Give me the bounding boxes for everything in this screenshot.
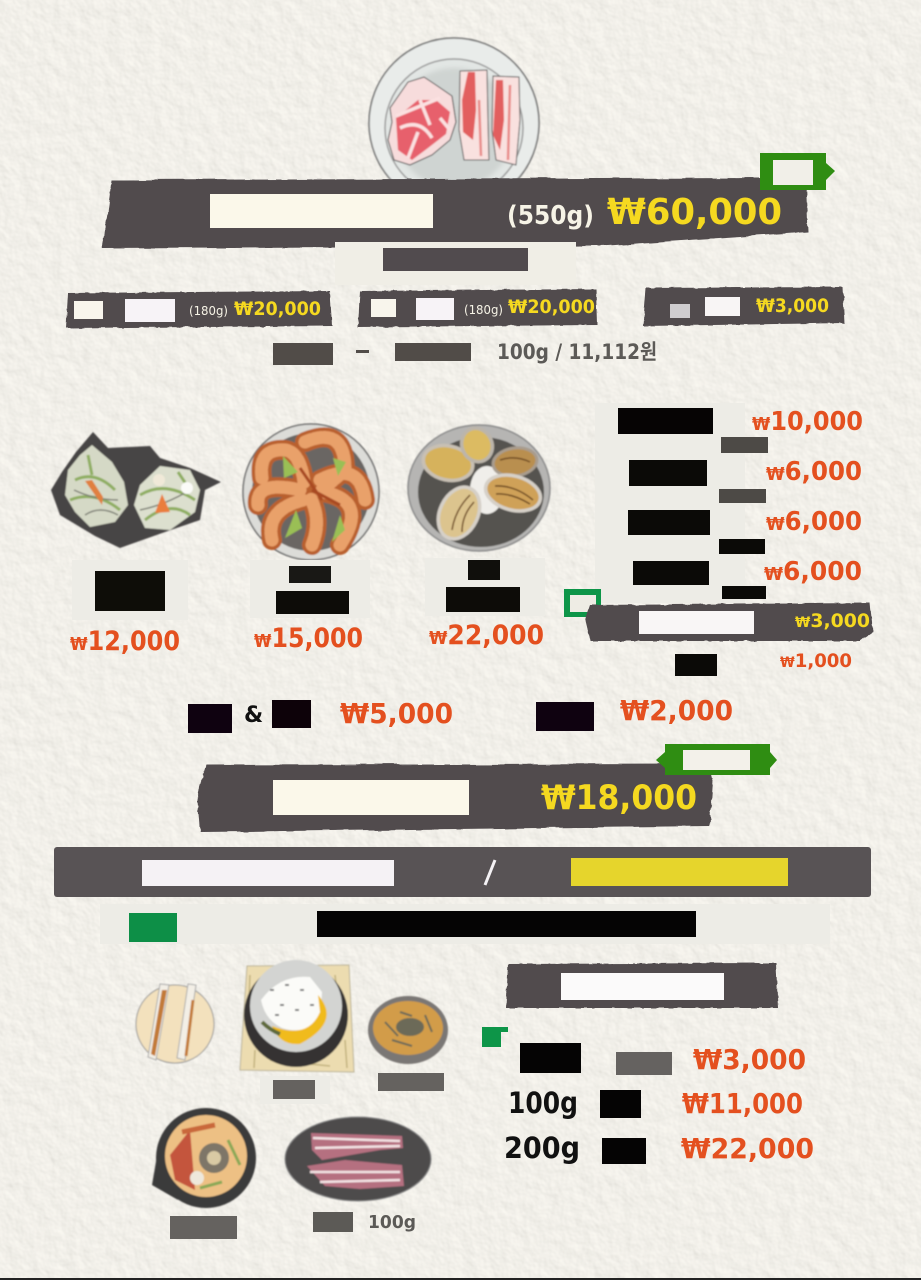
drink row: ₩2,000 xyxy=(620,694,733,727)
side item 4: ₩6,000 xyxy=(764,557,862,587)
price: dish 3: ₩22,000 xyxy=(429,620,544,651)
main set name xyxy=(210,194,433,228)
side bar: ₩3,000 xyxy=(795,610,870,632)
illustration: wooden lid xyxy=(136,984,214,1063)
side item 3: ₩6,000 xyxy=(766,507,862,537)
unit price line: 100g / 11,112원 xyxy=(497,340,657,364)
green marker small xyxy=(482,1027,508,1047)
drink row xyxy=(188,694,733,733)
green marker xyxy=(564,589,601,617)
food label: rice xyxy=(260,1076,330,1104)
panel heading: extra meat xyxy=(506,963,778,1008)
food label: pork with weight: 100g xyxy=(368,1212,416,1233)
side item 2: ₩6,000 xyxy=(766,457,862,487)
unit price line xyxy=(273,340,657,365)
dish 1 label xyxy=(72,560,188,620)
side item 1: ₩10,000 xyxy=(752,407,863,437)
side item 2 xyxy=(629,457,862,503)
illustration: stew pot xyxy=(152,1108,256,1208)
extra meat row 3: ₩22,000 xyxy=(681,1132,814,1165)
sub item bar 3: ₩3,000 xyxy=(756,295,829,317)
illustration: pork plate xyxy=(285,1117,431,1201)
food label: side xyxy=(378,1073,444,1091)
banner: lunch set xyxy=(197,764,713,832)
notice row xyxy=(100,904,830,944)
side item 4 xyxy=(633,557,862,599)
extra item: ₩1,000 xyxy=(780,650,852,672)
extra meat row 1 xyxy=(520,1043,806,1076)
main set weight: (550g) xyxy=(507,201,594,231)
sub item bar 1 xyxy=(66,291,332,328)
sub item bar 2: (180g) xyxy=(464,303,503,317)
extra meat row 2: ₩11,000 xyxy=(682,1087,803,1120)
illustration: meat plate xyxy=(369,38,539,208)
extra meat row 1: ₩3,000 xyxy=(693,1043,806,1076)
banner: main set xyxy=(102,178,808,248)
sub item bar 2: ₩20,000 xyxy=(508,296,595,318)
extra item xyxy=(675,650,852,676)
sub item bar 3 xyxy=(643,287,845,326)
food label: stew xyxy=(170,1216,237,1239)
sub item bar 1: (180g) xyxy=(189,304,228,318)
sub item bar 1: ₩20,000 xyxy=(234,298,321,320)
tag: green badge top xyxy=(760,153,835,190)
drink row: & xyxy=(244,703,263,728)
dish 3 label xyxy=(425,558,545,616)
illustration: abalone plate xyxy=(408,423,550,551)
extra meat row 3 xyxy=(504,1131,814,1165)
drink row: ₩5,000 xyxy=(340,697,453,730)
tag: green badge middle xyxy=(656,744,777,775)
price: dish 2: ₩15,000 xyxy=(254,623,363,654)
price: dish 1: ₩12,000 xyxy=(70,626,180,657)
sub item bar 2 xyxy=(358,289,597,327)
main set price: ₩60,000 xyxy=(607,192,782,233)
illustration: small side bowl xyxy=(368,996,448,1064)
wide bar xyxy=(54,847,871,897)
food label: pork with weight xyxy=(313,1212,416,1233)
extra meat row 2: 100g xyxy=(508,1086,578,1120)
subtitle box xyxy=(335,242,576,285)
illustration: lettuce wraps xyxy=(51,432,221,548)
banner: lunch set: ₩18,000 xyxy=(541,778,697,818)
illustration: shrimp plate xyxy=(243,424,379,560)
extra meat row 3: 200g xyxy=(504,1131,580,1165)
side menu list xyxy=(595,403,863,603)
dish 2 label xyxy=(250,560,370,618)
side item 1 xyxy=(618,407,863,453)
side bar xyxy=(585,603,873,641)
extra meat row 2 xyxy=(508,1086,803,1120)
side item 3 xyxy=(628,507,862,554)
illustration: stone bowl rice xyxy=(240,960,354,1072)
